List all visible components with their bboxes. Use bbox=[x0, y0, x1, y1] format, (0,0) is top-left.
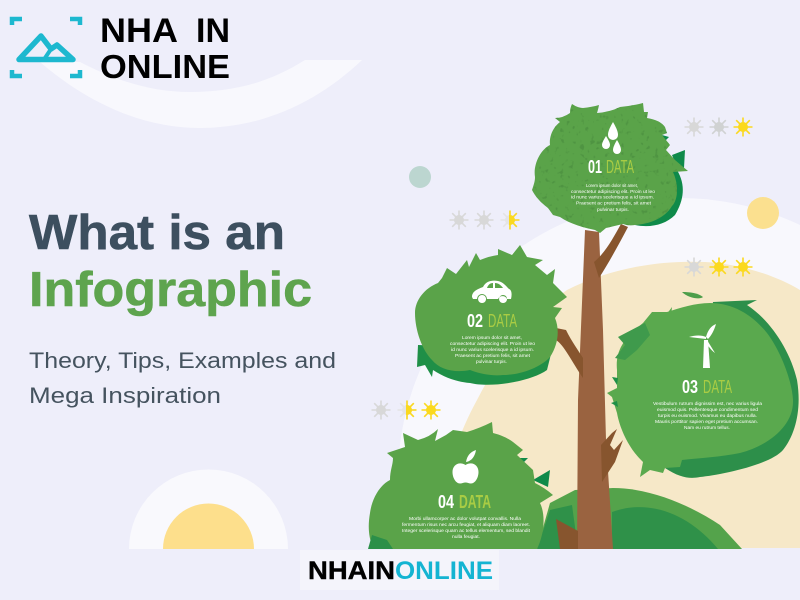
rating suns 04 bbox=[372, 400, 440, 420]
body text 01: id nunc varius scelerisque a id ipsum. bbox=[571, 194, 654, 200]
heading 04 data: 04 bbox=[438, 492, 454, 512]
heading 01 data: DATA bbox=[606, 157, 634, 177]
half sun decoration bbox=[129, 470, 288, 549]
icon: water drops bbox=[602, 122, 621, 154]
body text 04: Morbi ullamcorper ac dolor volutpat convallis. Nulla bbox=[409, 516, 521, 521]
body text 02: id nunc varius scelerisque a id ipsum. bbox=[451, 347, 534, 352]
heading 01 data bbox=[588, 157, 634, 177]
logo: ONLINE bbox=[100, 48, 230, 85]
body text 03: turpis eu euismod. Vivamus eu dapibus nulla. bbox=[658, 413, 757, 418]
canopy 03 bbox=[607, 292, 799, 478]
panel: 02 data bbox=[415, 245, 567, 385]
body text 01 bbox=[571, 183, 655, 212]
body text 02: pulvinar turpis. bbox=[476, 359, 507, 364]
logo icon bbox=[12, 19, 80, 76]
heading 02 data bbox=[467, 311, 517, 331]
rating suns 01 bbox=[684, 118, 752, 136]
bottom brand banner: NHAIN bbox=[308, 557, 395, 585]
heading 04 data: DATA bbox=[459, 492, 491, 512]
title: Infographic bbox=[29, 263, 312, 317]
background white hill bbox=[398, 198, 800, 548]
title bbox=[29, 206, 312, 317]
body text 03: Vestibulum rutrum dignissim est, nec varius ligula bbox=[653, 401, 762, 406]
body text 04: Integer scelerisque quam ac tellus elementum, sed blandit bbox=[402, 528, 531, 533]
subtitle: Mega Inspiration bbox=[29, 383, 221, 408]
icon: apple bbox=[452, 450, 478, 484]
panel: 03 data bbox=[607, 292, 799, 478]
rating suns 02 bbox=[450, 210, 520, 230]
body text 04: nulla feugiat. bbox=[452, 534, 480, 539]
body text 04: fermentum risus nec arcu feugiat, et aliquam diam laoreet. bbox=[402, 522, 530, 527]
bottom brand banner: ONLINE bbox=[395, 557, 493, 585]
tree trunk and branches bbox=[556, 224, 628, 549]
pale teal dot bbox=[409, 166, 431, 188]
icon: wind turbine bbox=[689, 324, 716, 368]
canopy 01 bbox=[532, 103, 688, 233]
heading 02 data: 02 bbox=[467, 311, 483, 331]
panel: 04 data bbox=[368, 422, 553, 549]
pale yellow sun bbox=[747, 197, 779, 229]
body text 01: consectetur adipiscing elit. Proin ut leo bbox=[571, 189, 655, 194]
body text 03: Nam eu rutrum tellus. bbox=[684, 425, 730, 430]
logo wordmark: NHA bbox=[100, 12, 178, 50]
background white crescent bbox=[40, 60, 362, 128]
logo bbox=[12, 12, 230, 85]
rating suns 03 bbox=[684, 258, 752, 276]
body text 01: pulvinar turpis. bbox=[597, 207, 629, 212]
body text 01: Lorem ipsum dolor sit amet, bbox=[586, 183, 638, 188]
body text 02 bbox=[450, 335, 535, 364]
subtitle: Theory, Tips, Examples and bbox=[29, 348, 336, 373]
body text 02: Lorem ipsum dolor sit amet, bbox=[462, 335, 522, 340]
canopy 04 bbox=[368, 422, 553, 549]
icon: car bbox=[472, 281, 512, 303]
bottom bush bbox=[537, 488, 742, 549]
body text 04 bbox=[402, 516, 531, 539]
subtitle bbox=[29, 348, 336, 408]
body text 02: consectetur adipiscing elit. Proin ut leo bbox=[450, 341, 535, 346]
panel: 01 data bbox=[532, 103, 688, 233]
body text 02: Praesent ac pretium felis, sit amet bbox=[455, 353, 531, 358]
heading 03 data bbox=[682, 377, 732, 397]
heading 04 data bbox=[438, 492, 491, 512]
heading 02 data: DATA bbox=[488, 311, 517, 331]
canopy 02 bbox=[415, 245, 567, 385]
background beige hill bbox=[432, 262, 800, 548]
heading 01 data: 01 bbox=[588, 157, 602, 177]
logo: IN bbox=[196, 12, 230, 50]
bottom brand banner bbox=[300, 550, 499, 590]
heading 03 data: 03 bbox=[682, 377, 698, 397]
heading 03 data: DATA bbox=[703, 377, 732, 397]
body text 03 bbox=[653, 401, 762, 430]
body text 01: Praesent ac pretium felis, sit amet bbox=[576, 200, 652, 206]
body text 03: Mauris porttitor sapien eget pretium accumsan. bbox=[655, 419, 758, 424]
body text 03: euismod quis. Pellentesque condimentum sed bbox=[657, 407, 758, 412]
title: What is an bbox=[29, 206, 285, 260]
